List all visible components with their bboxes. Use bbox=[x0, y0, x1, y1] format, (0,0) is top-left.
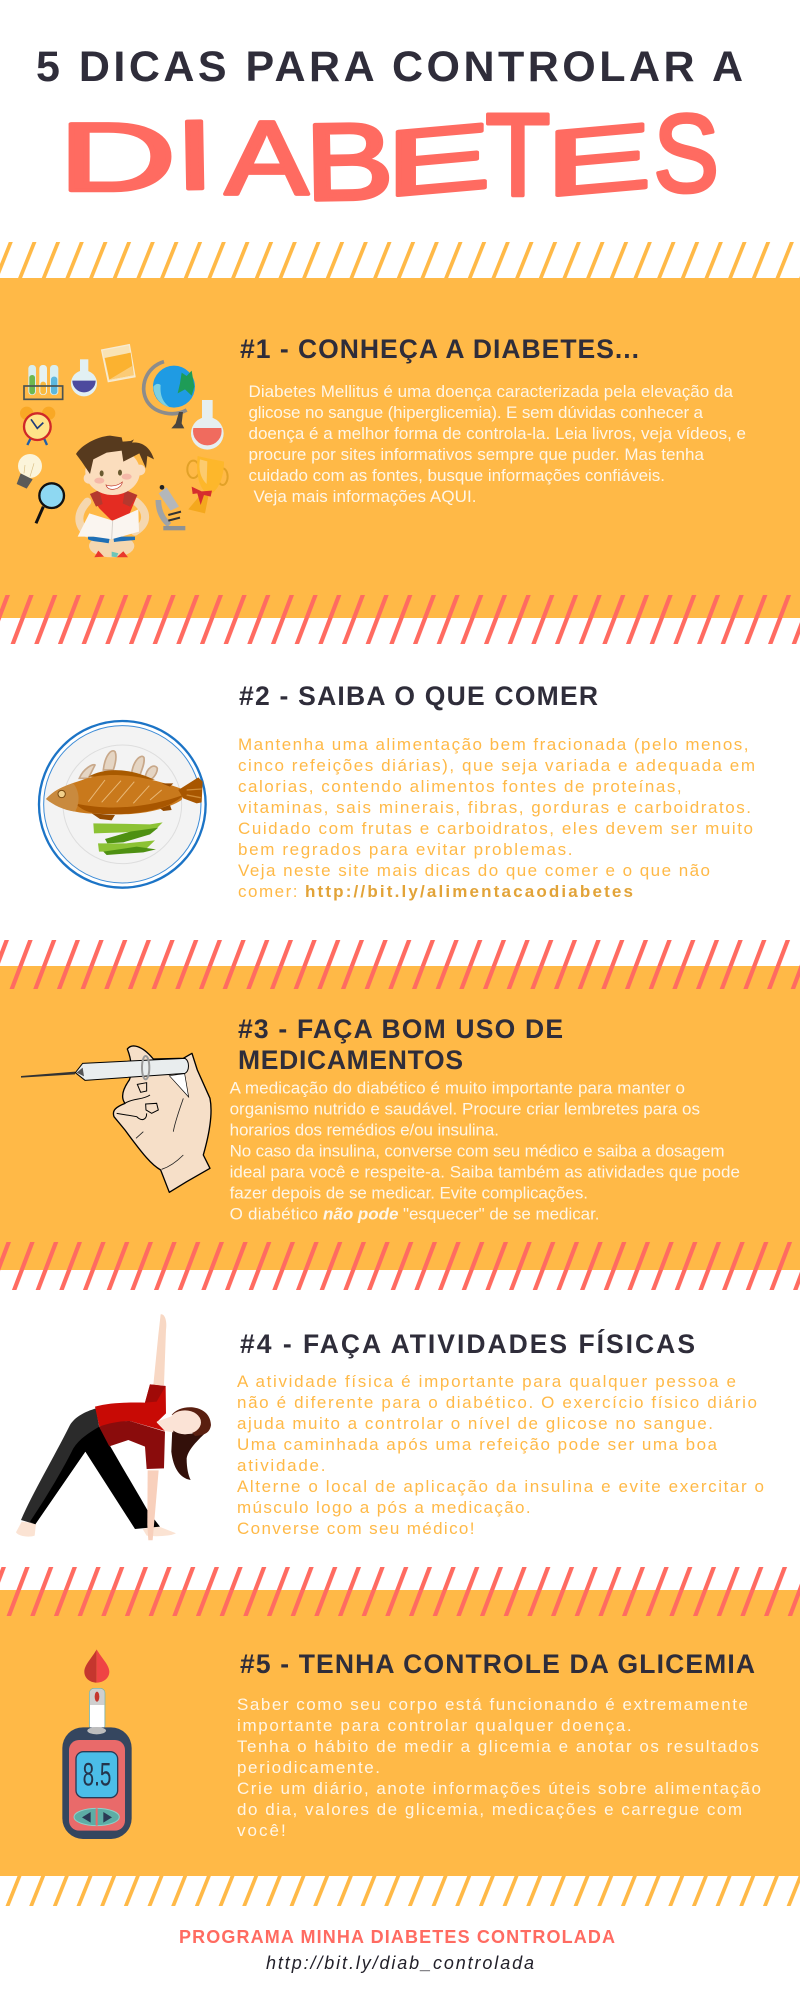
raised arm bbox=[153, 1314, 166, 1385]
illustration: boy bbox=[76, 436, 154, 557]
text block: tip 1: doença é a melhor forma de controla-la. Leia livros, veja vídeos, e bbox=[248, 424, 746, 443]
text block: tip 4: Alterne o local de aplicação da insulina e evite exercitar o bbox=[237, 1477, 764, 1496]
text block: tip 2: cinco refeições diárias), que seja variada e adequada em bbox=[238, 756, 755, 775]
panel: tip 3 bbox=[0, 966, 800, 1270]
title: Diabetes: E bbox=[386, 103, 491, 217]
text block: tip 4: Uma caminhada após uma refeição pode ser uma boa bbox=[237, 1435, 718, 1454]
heading: tip 2: #2 - SAIBA O QUE COMER bbox=[239, 681, 598, 711]
icon: test strip bbox=[89, 1688, 105, 1730]
title: Diabetes: I bbox=[174, 100, 215, 210]
text block: tip 2: bem regrados para evitar problemas. bbox=[238, 840, 572, 859]
icon: meter body: 8.5 bbox=[83, 1756, 111, 1792]
title: Diabetes: D bbox=[58, 103, 176, 211]
text block: tip 3: No caso da insulina, converse com seu médico e saiba a dosagem bbox=[230, 1142, 724, 1160]
footer: programme name: PROGRAMA MINHA DIABETES CONTROLADA bbox=[179, 1927, 615, 1947]
icon: plate bbox=[39, 721, 206, 888]
heading: tip 4: #4 - FAÇA ATIVIDADES FÍSICAS bbox=[240, 1329, 695, 1359]
icon: boy reading with science objects bbox=[17, 345, 228, 557]
text block: tip 5: periodicamente. bbox=[237, 1758, 380, 1777]
text block: tip 3: fazer depois de se medicar. Evite complicações. bbox=[230, 1184, 588, 1202]
icon: hand holding syringe bbox=[21, 1046, 211, 1192]
icon: alarm clock bbox=[20, 407, 55, 445]
text block: tip 1: Diabetes Mellitus é uma doença caracterizada pela elevação da bbox=[248, 382, 734, 401]
title: Diabetes: A bbox=[225, 100, 308, 217]
text block: tip 4: ajuda muito a controlar o nível de glicose no sangue. bbox=[237, 1414, 713, 1433]
text block: tip 3: A medicação do diabético é muito importante para manter o bbox=[230, 1078, 685, 1098]
text block: tip 2: comer: bbox=[238, 882, 298, 901]
icon: test tubes bbox=[24, 365, 63, 399]
heading: tip 5: #5 - TENHA CONTROLE DA GLICEMIA bbox=[240, 1649, 755, 1679]
text block: tip 3: não pode bbox=[323, 1204, 398, 1224]
text block: tip 4 bbox=[237, 1372, 764, 1538]
title: Diabetes: T bbox=[486, 89, 550, 220]
title: 5 dicas para controlar a: 5 DICAS PARA CONTROLAR A bbox=[36, 43, 743, 91]
icon: glucose meter with blood drop bbox=[62, 1649, 132, 1839]
text block: tip 2: Mantenha uma alimentação bem fracionada (pelo menos, bbox=[238, 735, 748, 754]
icon: asparagus bbox=[93, 822, 163, 855]
icon: juice beaker bbox=[102, 345, 135, 382]
text block: tip 3: "esquecer" de se medicar. bbox=[403, 1204, 600, 1224]
text block: tip 2: Veja neste site mais dicas do que comer e o que não bbox=[238, 861, 710, 880]
icon: globe bbox=[144, 362, 195, 428]
legs bbox=[16, 1408, 176, 1537]
icon: hand bbox=[113, 1046, 211, 1192]
footer: link: http://bit.ly/diab_controlada bbox=[266, 1953, 534, 1973]
text block: tip 3: horarios dos remédios e/ou insulina. bbox=[230, 1120, 499, 1140]
text block: tip 5 bbox=[237, 1695, 761, 1840]
text block: tip 1: procure por sites informativos sempre que puder. Mas tenha bbox=[248, 445, 705, 464]
title: Diabetes bbox=[58, 89, 719, 223]
illustration: woman in yoga triangle pose bbox=[16, 1314, 211, 1540]
text block: tip 1 bbox=[248, 382, 746, 506]
text block: tip 3: organismo nutrido e saudável. Procure criar lembretes para os bbox=[230, 1100, 700, 1118]
icon: microscope bbox=[158, 485, 185, 530]
heading: tip 3: #3 - FAÇA BOM USO DE bbox=[238, 1014, 563, 1044]
text block: tip 4: Converse com seu médico! bbox=[237, 1519, 474, 1538]
text block: tip 1: cuidado com as fontes, busque informações confiáveis. bbox=[248, 466, 665, 485]
heading: tip 3: MEDICAMENTOS bbox=[238, 1045, 463, 1075]
text block: tip 5: do dia, valores de glicemia, medicações e carregue com bbox=[237, 1800, 742, 1819]
hair and head bbox=[157, 1407, 211, 1480]
text block: tip 4: músculo logo a pós a medicação. bbox=[237, 1498, 531, 1517]
heading: tip 1: #1 - CONHEÇA A DIABETES... bbox=[240, 334, 639, 364]
text block: tip 2: Cuidado com frutas e carboidratos, eles devem ser muito bbox=[238, 819, 753, 838]
panel: tip 1 bbox=[0, 278, 800, 618]
panel: tip 4 bbox=[16, 1314, 764, 1540]
text block: tip 4: atividade. bbox=[237, 1456, 326, 1475]
text block: tip 3: O diabético bbox=[230, 1204, 318, 1224]
text block: tip 1: glicose no sangue (hiperglicemia). E sem dúvidas conhecer a bbox=[248, 403, 704, 422]
torso bbox=[95, 1384, 166, 1469]
text block: tip 4: A atividade física é importante para qualquer pessoa e bbox=[237, 1372, 736, 1391]
text block: tip 2 bbox=[238, 735, 755, 901]
text block: tip 3 bbox=[230, 1078, 740, 1224]
text block: tip 2: calorias, contendo alimentos fontes de proteínas, bbox=[238, 777, 682, 796]
icon: magnifier bbox=[36, 483, 64, 523]
icon: meter body bbox=[62, 1727, 132, 1839]
text block: tip 1: Veja mais informações AQUI. bbox=[254, 487, 476, 506]
title: Diabetes: E bbox=[545, 103, 652, 216]
icon: trophy bbox=[187, 456, 228, 513]
icon: blood drop bbox=[84, 1649, 109, 1683]
icon: syringe bbox=[21, 1056, 188, 1080]
icon: fish bbox=[46, 751, 203, 820]
title: Diabetes: S bbox=[654, 93, 719, 216]
text block: tip 4: não é diferente para o diabético. O exercício físico diário bbox=[237, 1393, 757, 1412]
text block: tip 5: você! bbox=[237, 1821, 286, 1840]
text block: tip 5: Tenha o hábito de medir a glicemia e anotar os resultados bbox=[237, 1737, 759, 1756]
title: Diabetes: B bbox=[304, 100, 395, 223]
icon: plate with fish and asparagus bbox=[39, 721, 206, 888]
text block: tip 5: importante para controlar qualquer doença. bbox=[237, 1716, 632, 1735]
lower arm bbox=[147, 1470, 159, 1540]
icon: purple flask bbox=[71, 359, 97, 396]
icon: light bulb bbox=[17, 454, 42, 489]
text block: tip 3: ideal para você e respeite-a. Saiba também as atividades que pode bbox=[230, 1162, 740, 1182]
heading: tip 3 bbox=[238, 1014, 563, 1075]
text block: tip 5: Saber como seu corpo está funcionando é extremamente bbox=[237, 1695, 748, 1714]
panel: tip 5 bbox=[0, 1590, 800, 1876]
text block: tip 2: http://bit.ly/alimentacaodiabetes bbox=[305, 882, 633, 901]
text block: tip 5: Crie um diário, anote informações úteis sobre alimentação bbox=[237, 1779, 761, 1798]
panel: tip 2 bbox=[39, 681, 755, 901]
icon: red flask bbox=[191, 400, 224, 450]
text block: tip 2: vitaminas, sais minerais, fibras, gorduras e carboidratos. bbox=[238, 798, 751, 817]
